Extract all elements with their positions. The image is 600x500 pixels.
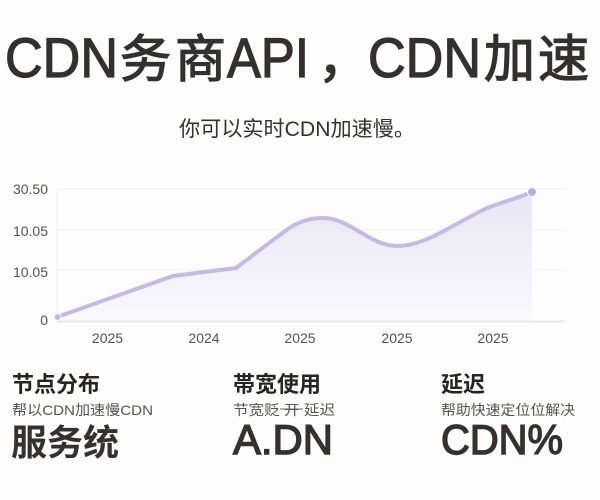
title: API (227, 26, 309, 89)
x axis labels: 2025 (381, 330, 413, 346)
title: CDN (368, 26, 481, 89)
x axis labels: 2025 (284, 330, 316, 346)
title: 加 (484, 18, 535, 92)
value: A.DN (233, 416, 333, 463)
heading: 帯宽使用 (233, 367, 321, 399)
description: 帮以CDN加速慢CDN (12, 402, 153, 418)
x axis labels: 2025 (477, 330, 509, 346)
x axis labels: 2025 (92, 330, 123, 346)
description: 帮助快速定位位解决 (441, 402, 575, 418)
heading: 延迟 (441, 367, 485, 399)
start point (54, 314, 61, 320)
description: 节宽贬 开 延迟 (233, 402, 335, 418)
x axis labels (92, 330, 509, 346)
chart area fill (57, 192, 532, 321)
x axis line (57, 320, 565, 322)
x axis labels: 2024 (188, 330, 220, 346)
title: 务 (120, 18, 171, 92)
y axis labels: 10.05 (13, 223, 48, 239)
heading: 节点分布 (12, 367, 100, 399)
value: 服务统 (11, 414, 119, 466)
title: 速 (538, 18, 589, 92)
stat: bandwidth usage (233, 367, 335, 463)
title: CDN (5, 26, 118, 89)
value: CDN% (441, 416, 563, 463)
stat: latency (441, 367, 575, 463)
title: ， (318, 18, 369, 92)
subtitle: 你可以实时CDN加速慢。 (179, 118, 415, 141)
y axis labels: 30.50 (13, 181, 48, 197)
stat: node distribution (11, 367, 153, 466)
title (5, 18, 589, 92)
end point (528, 188, 536, 196)
y axis labels (13, 181, 48, 328)
y axis labels: 0 (40, 312, 48, 328)
y axis labels: 10.05 (13, 264, 48, 280)
area chart (13, 181, 565, 346)
title: 商 (175, 18, 226, 92)
chart line (57, 192, 532, 317)
